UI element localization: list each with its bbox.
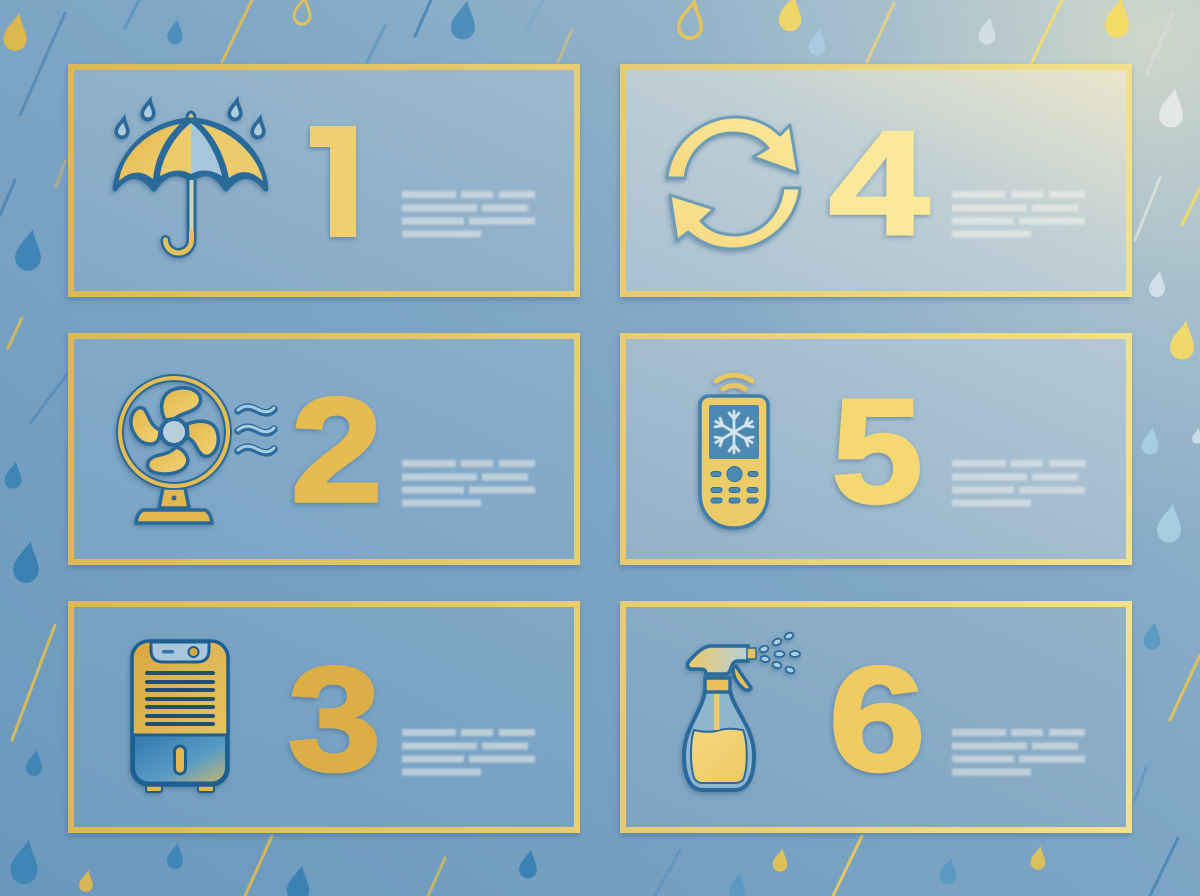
- icon: circular recycle arrows: [667, 117, 800, 249]
- icon: umbrella with rain drops: [115, 101, 266, 253]
- blurred text placeholder lines: [402, 460, 535, 506]
- icon: electric fan with air waves: [120, 378, 228, 523]
- panel 3: dehumidifier: [71, 604, 577, 830]
- number 5: 5: [832, 368, 923, 533]
- number 3: 3: [288, 637, 381, 802]
- number 1: 1: [285, 94, 373, 270]
- icon: air waves: [238, 406, 274, 453]
- icon: spray bottle: [684, 631, 800, 790]
- number 6: 6: [829, 637, 925, 802]
- panel 5: remote control: [623, 336, 1129, 562]
- blurred text placeholder lines: [402, 191, 535, 238]
- blurred text placeholder lines: [952, 191, 1085, 238]
- number 4: 4: [829, 100, 929, 265]
- panel 2: fan: [71, 336, 577, 562]
- panel 1: umbrella: [71, 67, 577, 294]
- panel 6: spray bottle: [623, 604, 1129, 830]
- icon: snowflake: [713, 411, 755, 453]
- blurred text placeholder lines: [952, 729, 1085, 776]
- panel 4: cycle: [623, 67, 1129, 294]
- blurred text placeholder lines: [402, 729, 535, 776]
- blurred text placeholder lines: [952, 460, 1085, 506]
- icon: air conditioner remote: [700, 375, 768, 528]
- icon: dehumidifier: [132, 641, 228, 792]
- number 2: 2: [291, 368, 382, 533]
